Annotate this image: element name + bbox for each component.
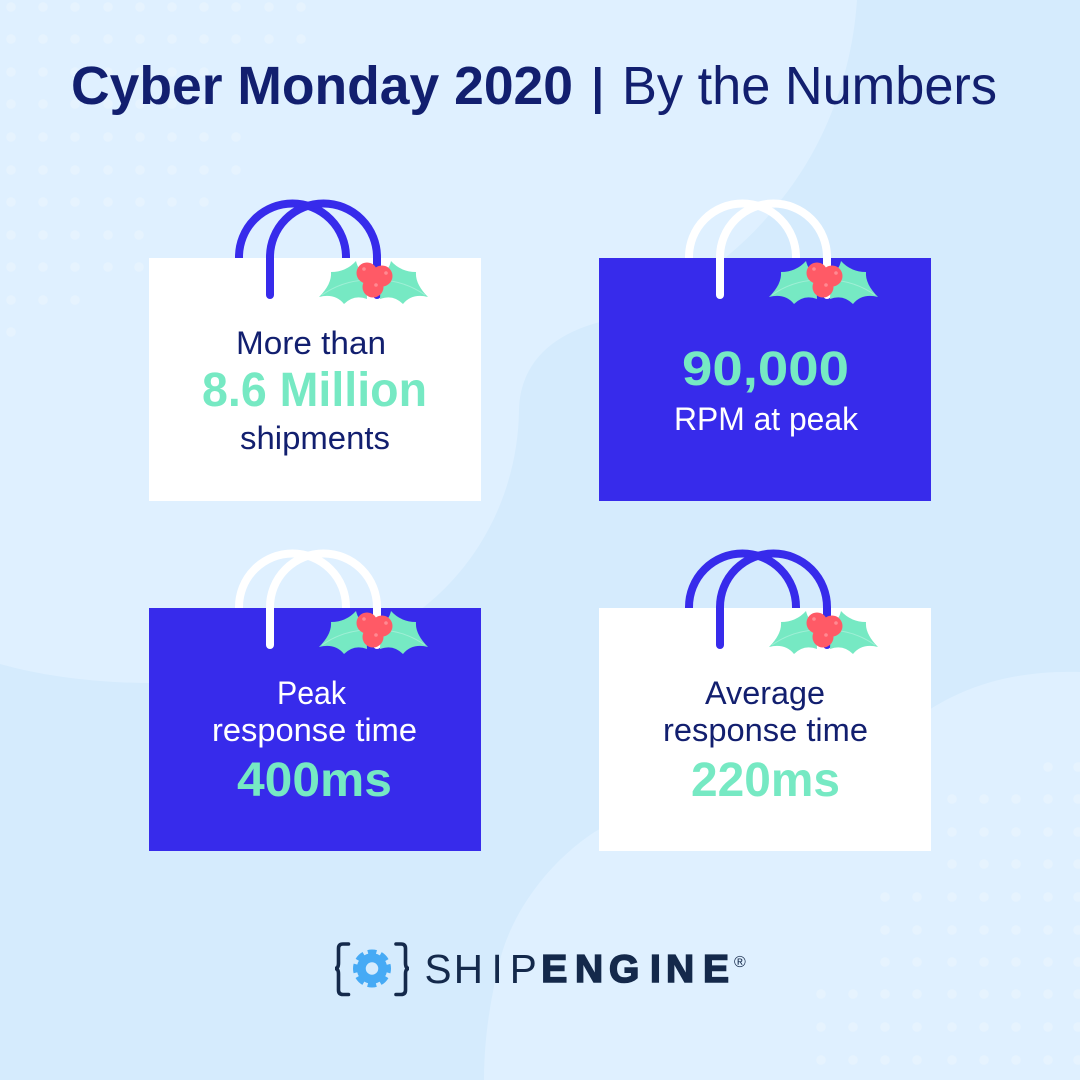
logo wordmark — [424, 946, 746, 992]
text: peak response stat — [212, 675, 417, 807]
icon: holly — [769, 261, 878, 304]
logo wordmark: ENGINE — [541, 948, 729, 991]
icon: holly — [319, 611, 428, 654]
panel: RPM bag — [599, 203, 931, 501]
title: By the Numbers — [622, 56, 997, 116]
logo wordmark: ® — [734, 954, 746, 971]
icon: braces and gear — [335, 944, 409, 994]
panel: average response bag — [599, 553, 931, 851]
text: RPM stat: RPM at peak — [674, 401, 859, 437]
text: RPM stat — [674, 343, 859, 437]
icon: bag handle — [720, 554, 827, 645]
title: Cyber Monday 2020 — [71, 56, 573, 116]
text: peak response stat: 400ms — [237, 754, 392, 807]
text: average response stat: Average — [705, 675, 825, 711]
text: shipments stat: shipments — [240, 420, 390, 456]
text: average response stat: response time — [663, 712, 868, 748]
text: shipments stat: More than — [236, 325, 386, 361]
icon: holly — [319, 261, 428, 304]
text: average response stat — [663, 675, 868, 807]
panel: shipments bag — [149, 203, 481, 501]
text: peak response stat: Peak — [277, 675, 347, 711]
text: RPM stat: 90,000 — [682, 343, 849, 396]
icon: bag handle — [270, 553, 377, 645]
title — [71, 56, 997, 116]
text: shipments stat: 8.6 Million — [202, 364, 427, 417]
text: shipments stat — [202, 325, 427, 456]
logo wordmark: SHIP — [424, 946, 537, 992]
icon: bag handle — [270, 203, 377, 295]
icon: holly — [769, 611, 878, 654]
icon: bag handle — [720, 204, 827, 295]
text: average response stat: 220ms — [691, 754, 840, 807]
logo: ShipEngine — [335, 944, 746, 994]
text: peak response stat: response time — [212, 712, 417, 748]
panel: peak response bag — [149, 553, 481, 851]
